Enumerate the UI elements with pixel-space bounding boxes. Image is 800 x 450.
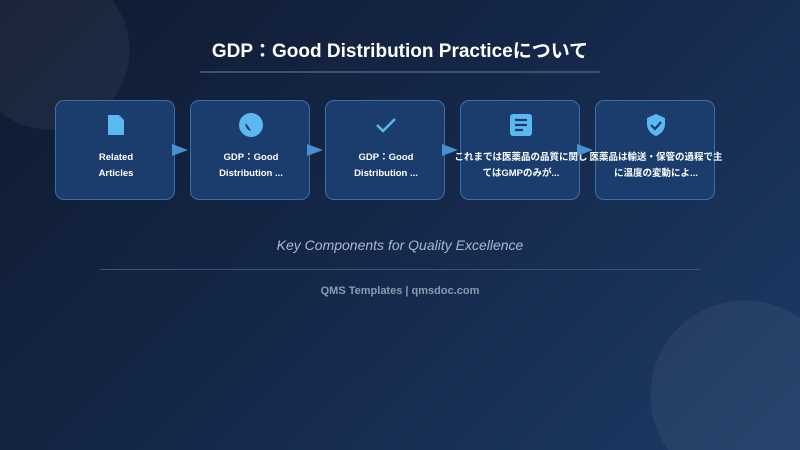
icon: document [108, 115, 124, 135]
title: GDP：Good Distribution Practiceについて [212, 41, 588, 62]
card 2 [190, 100, 310, 200]
card 5: 医薬品は輸送・保管の過程で主 [589, 152, 722, 163]
card 5 [595, 100, 715, 200]
card 2: GDP：Good [224, 152, 278, 163]
card 4 [460, 100, 580, 200]
arrow 2 [307, 144, 323, 156]
card 4: これまでは医薬品の品質に関し [454, 152, 588, 163]
card 1: Articles [99, 168, 133, 178]
card 3 [325, 100, 445, 200]
subtitle: Key Components for Quality Excellence [277, 237, 523, 253]
card 5: に温度の変動によ... [614, 168, 698, 178]
icon: check [376, 118, 396, 133]
icon: shield [647, 114, 665, 136]
card 4: てはGMPのみが... [483, 168, 559, 178]
card 1: Related [99, 152, 133, 163]
card 2: Distribution ... [219, 168, 283, 178]
footer: QMS Templates | qmsdoc.com [321, 285, 479, 297]
icon: text doc [510, 114, 532, 136]
card 3: Distribution ... [354, 168, 418, 178]
card 1 [55, 100, 175, 200]
card 3: GDP：Good [359, 152, 413, 163]
icon: circle [239, 113, 263, 137]
arrow 3 [442, 144, 458, 156]
arrow 4 [577, 144, 593, 156]
arrow 1 [172, 144, 188, 156]
